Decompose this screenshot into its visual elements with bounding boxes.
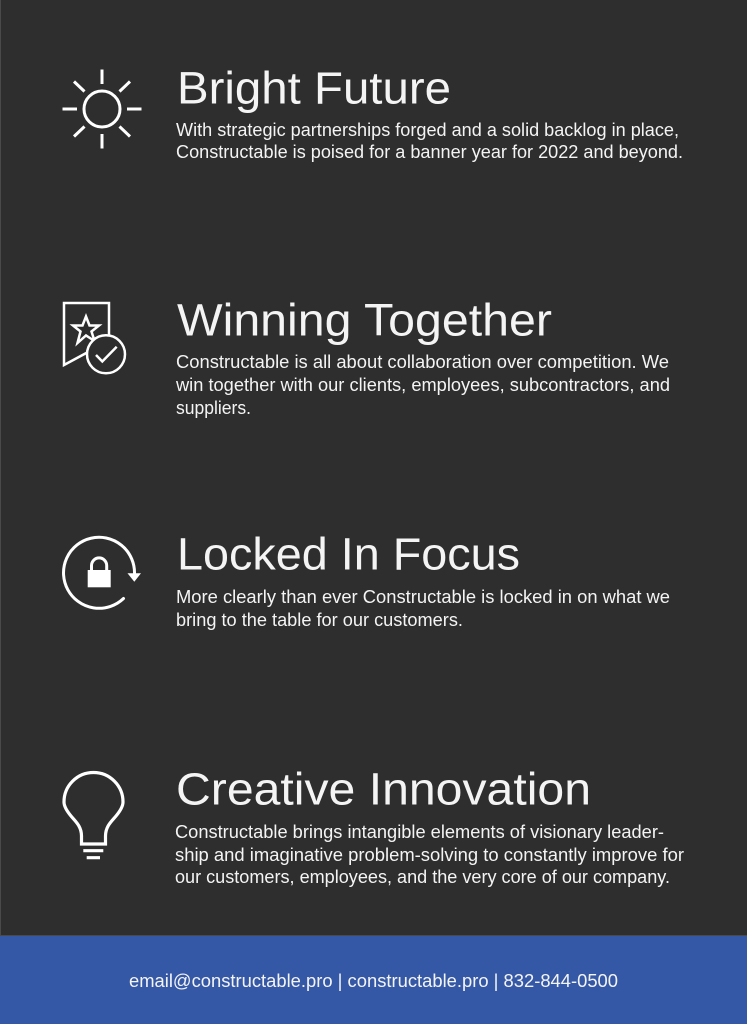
section: Creative Innovation [64, 764, 684, 887]
text: Locked In Focus description: bring to the table for our customers. [176, 610, 463, 630]
heading: Bright Future: Bright Future [177, 62, 451, 114]
heading: Locked In Focus: Locked In Focus [177, 528, 520, 580]
section: Locked In Focus [64, 528, 670, 630]
text: Winning Together description [175, 352, 670, 418]
text: Winning Together description: Constructable is all about collaboration over competition. We [176, 352, 669, 372]
text: Winning Together description: suppliers. [176, 398, 251, 418]
text: Locked In Focus description [176, 587, 670, 630]
text: Creative Innovation description: our customers, employees, and the very core of our company. [175, 867, 670, 887]
icon: padlock in rotating arrow [64, 537, 141, 608]
text: Winning Together description: win together with our clients, employees, subcontractors, and [175, 375, 670, 395]
text: Creative Innovation description [175, 822, 684, 887]
footer contact text: email@constructable.pro | constructable.pro | 832-844-0500 [129, 971, 618, 991]
icon: sun [62, 70, 142, 148]
text: Bright Future description: With strategic partnerships forged and a solid backlog in place, [176, 120, 679, 140]
section: Winning Together [64, 294, 670, 418]
section: Bright Future [62, 62, 683, 162]
icon: light bulb [64, 772, 123, 858]
footer bar [0, 936, 747, 1024]
text: Locked In Focus description: More clearly than ever Constructable is locked in on what we [176, 587, 670, 607]
heading: Creative Innovation: Creative Innovation [176, 764, 591, 814]
text: Bright Future description: Constructable is poised for a banner year for 2022 and beyond. [176, 142, 683, 162]
text: Bright Future description [176, 120, 683, 162]
heading: Winning Together: Winning Together [177, 294, 552, 346]
text: Creative Innovation description: Constructable brings intangible elements of visionary leader- [175, 822, 664, 842]
icon: ribbon with star and check [64, 303, 125, 373]
text: Creative Innovation description: ship and imaginative problem-solving to constantly improve for [175, 845, 684, 865]
